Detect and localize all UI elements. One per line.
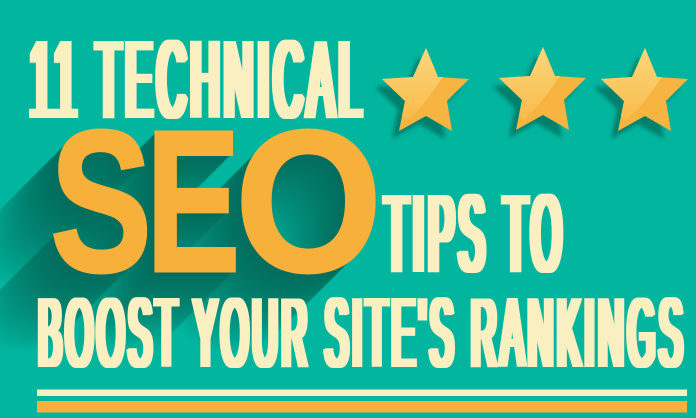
- icon: star 3: [594, 48, 688, 139]
- heading: SEO: S: [50, 88, 152, 314]
- icon: star 2: [492, 47, 586, 138]
- heading: SEO: O: [235, 88, 382, 314]
- icon: star 1: [375, 48, 469, 139]
- cream bar: [37, 390, 687, 396]
- orange bar: [37, 401, 687, 412]
- heading: SEO: E: [146, 88, 240, 314]
